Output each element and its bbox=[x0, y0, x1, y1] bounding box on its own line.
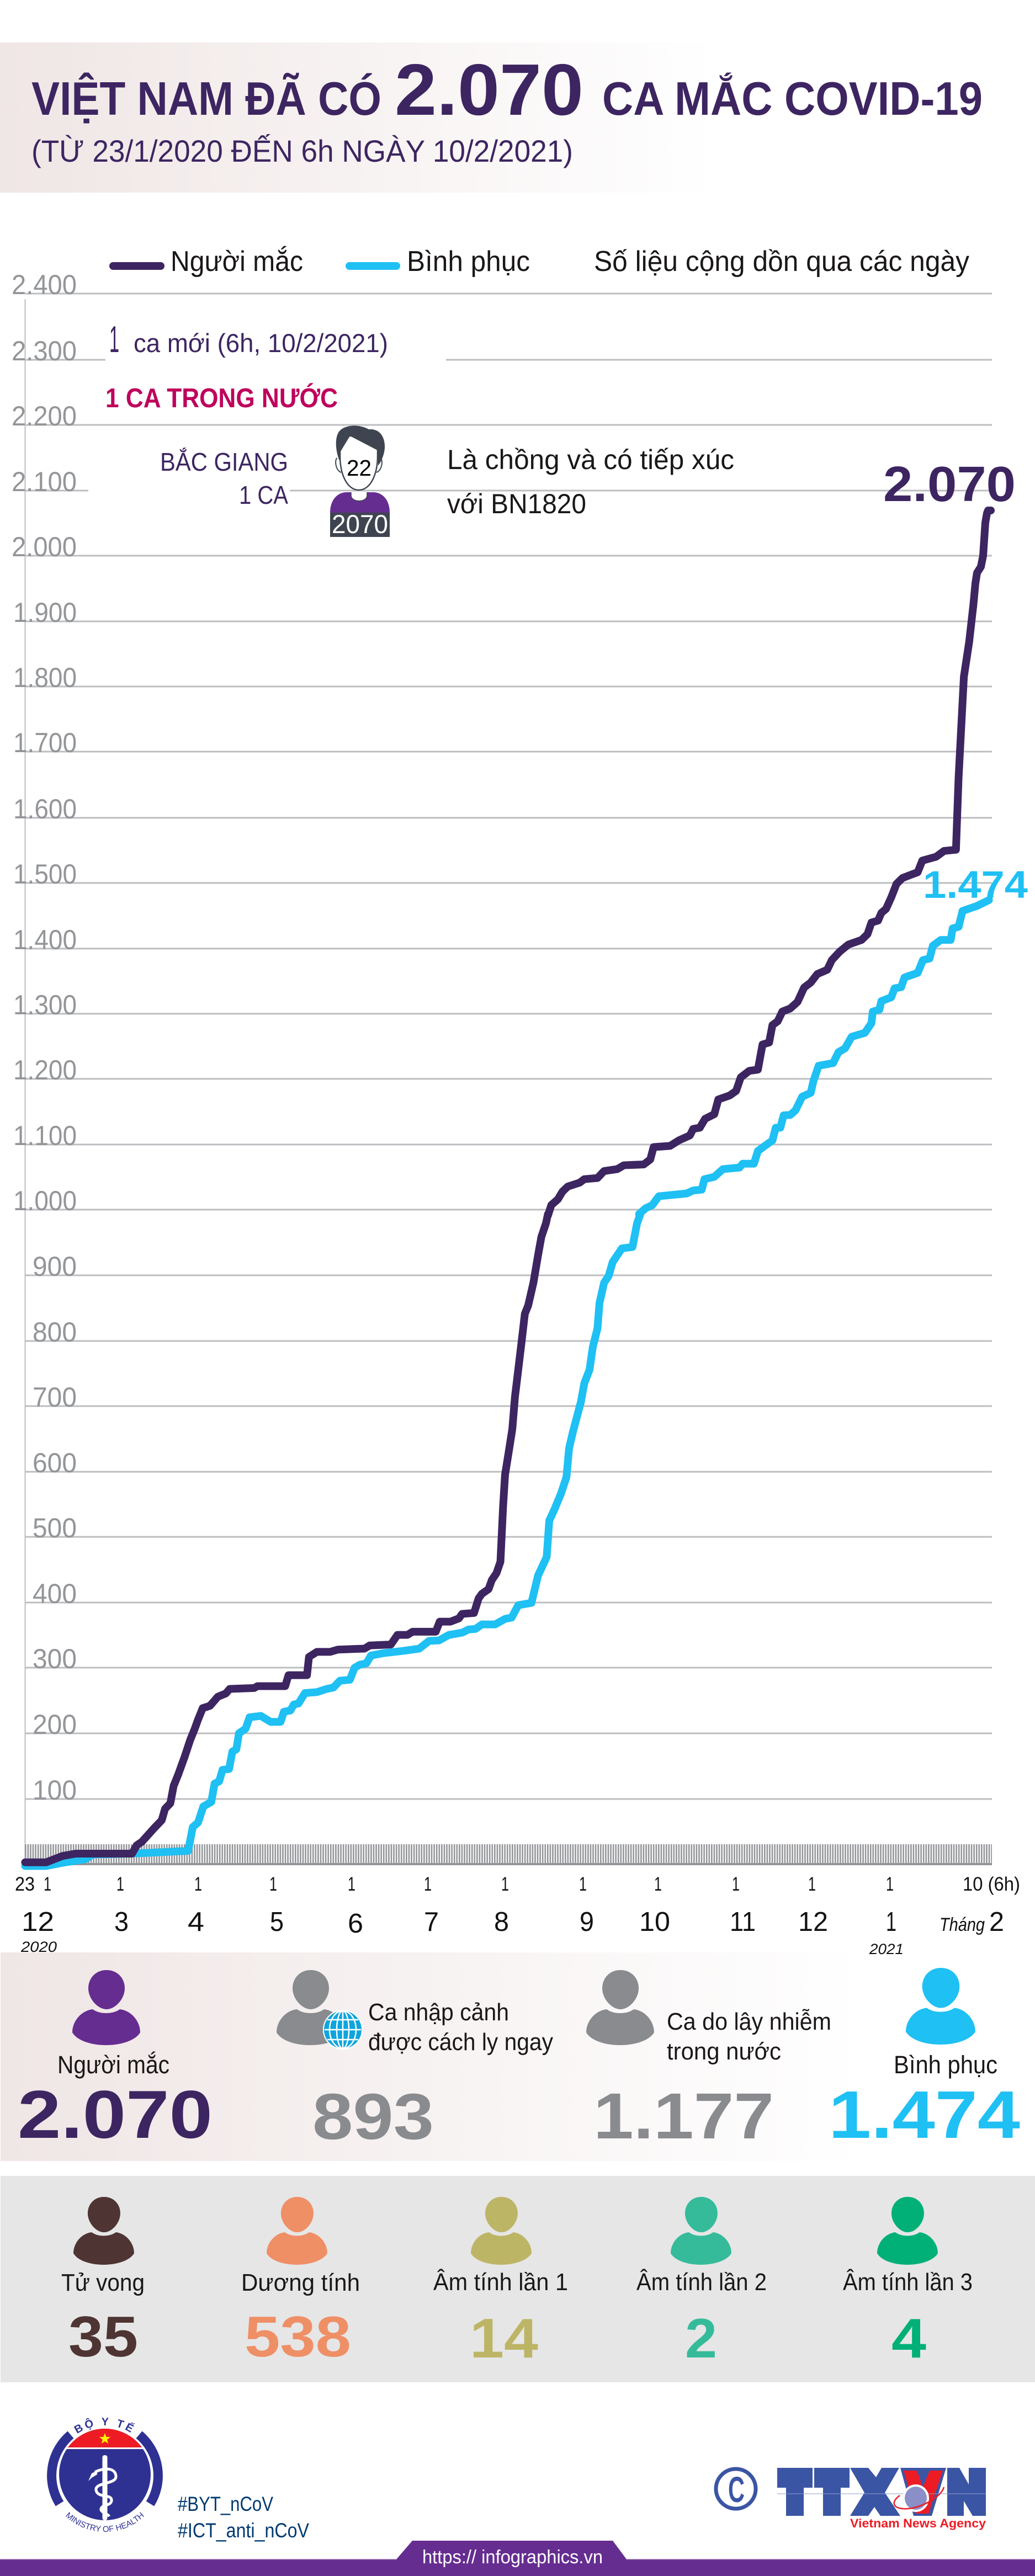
stat: domestic bbox=[586, 1970, 831, 2153]
y axis labels: 1.100 bbox=[13, 1120, 77, 1151]
status: negative once: 14 bbox=[470, 2308, 538, 2370]
y axis labels: 1.900 bbox=[13, 597, 77, 628]
x axis month labels: 5 bbox=[270, 1907, 284, 1937]
y axis labels: 1.500 bbox=[13, 859, 77, 890]
title: 2.070 bbox=[395, 49, 583, 130]
end value: recovered: 1.474 bbox=[923, 863, 1028, 906]
y axis labels: 1.000 bbox=[13, 1185, 77, 1216]
x axis day labels: 1 bbox=[886, 1874, 894, 1895]
patient icon: 22 bbox=[347, 455, 371, 481]
y axis labels bbox=[12, 269, 77, 1806]
title: CA MẮC COVID-19 bbox=[602, 72, 983, 125]
patient icon bbox=[330, 425, 390, 539]
x axis day labels: 1 bbox=[808, 1874, 816, 1895]
x axis day labels: 1 bbox=[501, 1874, 509, 1895]
footer bar bbox=[0, 2541, 1035, 2576]
location label: BẮC GIANG bbox=[160, 448, 288, 476]
x axis day labels: 1 bbox=[579, 1874, 587, 1895]
x axis month labels bbox=[22, 1907, 1004, 1939]
stat: domestic: Ca do lây nhiễm bbox=[667, 2008, 831, 2035]
logo: ministry of health: BỘ Y TẾ bbox=[74, 2418, 135, 2434]
x axis day labels: 1 bbox=[424, 1874, 432, 1895]
hashtags bbox=[178, 2493, 309, 2542]
panel: patient status bbox=[1, 2176, 1035, 2382]
y axis labels: 1.800 bbox=[13, 662, 77, 693]
status: deaths: 35 bbox=[68, 2305, 138, 2369]
status: negative three times bbox=[843, 2197, 973, 2370]
y axis labels: 200 bbox=[33, 1709, 77, 1740]
stat: imported: được cách ly ngay bbox=[368, 2029, 553, 2056]
y axis labels: 100 bbox=[33, 1775, 77, 1806]
status: negative three times: Âm tính lần 3 bbox=[843, 2269, 973, 2296]
y axis labels: 800 bbox=[33, 1317, 77, 1348]
x axis month labels: 7 bbox=[424, 1907, 439, 1937]
status: negative once: Âm tính lần 1 bbox=[433, 2269, 568, 2296]
status: positive: Dương tính bbox=[241, 2269, 360, 2296]
year 2021 label: 2021 bbox=[869, 1941, 904, 1957]
x axis day labels: 1 bbox=[44, 1874, 51, 1895]
status: negative once bbox=[433, 2197, 568, 2370]
legend: Số liệu cộng dồn qua các ngày bbox=[594, 246, 969, 278]
status: negative three times: 4 bbox=[891, 2308, 926, 2370]
stat: imported: Ca nhập cảnh bbox=[368, 1999, 509, 2026]
stat: domestic: trong nước bbox=[667, 2038, 781, 2065]
x axis day labels: 1 bbox=[348, 1874, 355, 1895]
logo: TTXVN: C bbox=[728, 2469, 745, 2510]
location label: 1 CA bbox=[239, 481, 288, 509]
header band bbox=[0, 42, 983, 193]
stat: confirmed: Người mắc bbox=[57, 2051, 169, 2079]
y axis labels: 1.300 bbox=[13, 989, 77, 1020]
x axis month labels: 12 bbox=[798, 1907, 828, 1937]
y axis labels: 2.300 bbox=[12, 336, 77, 366]
x axis month labels: 2 bbox=[989, 1907, 1004, 1937]
patient icon: 2070 bbox=[332, 509, 388, 539]
y axis labels: 2.200 bbox=[12, 401, 77, 432]
logo: ministry of health: MINISTRY OF HEALTH bbox=[66, 2512, 144, 2532]
y axis labels: 300 bbox=[33, 1643, 77, 1674]
x axis day labels: 1 bbox=[732, 1874, 740, 1895]
month axis caption: Tháng bbox=[940, 1914, 985, 1935]
logo: ministry of health bbox=[47, 2418, 163, 2532]
logo: TTXVN bbox=[716, 2468, 986, 2530]
x axis month labels: 6 bbox=[348, 1909, 363, 1939]
x axis month labels: 10 bbox=[639, 1907, 670, 1937]
status: deaths bbox=[61, 2197, 145, 2369]
status: negative twice: 2 bbox=[685, 2308, 717, 2370]
x axis month labels: 4 bbox=[188, 1907, 204, 1937]
website link: https:// infographics.vn bbox=[422, 2547, 603, 2568]
y axis labels: 400 bbox=[33, 1578, 77, 1609]
y axis labels: 700 bbox=[33, 1382, 77, 1413]
x axis day labels: 1 bbox=[269, 1874, 277, 1895]
x axis day labels: 1 bbox=[116, 1874, 124, 1895]
case description: Là chồng và có tiếp xúc bbox=[447, 444, 734, 475]
summary band bbox=[1, 1939, 1020, 2161]
y axis line bbox=[24, 299, 25, 1864]
location label bbox=[160, 448, 288, 509]
y axis labels: 1.700 bbox=[13, 727, 77, 758]
chart gridlines bbox=[25, 294, 992, 1799]
case description bbox=[447, 444, 734, 519]
stat: confirmed: 2.070 bbox=[18, 2077, 213, 2153]
y axis labels: 2.100 bbox=[12, 466, 77, 497]
title bbox=[31, 49, 983, 130]
legend bbox=[113, 246, 969, 278]
new case heading: 1 bbox=[109, 318, 119, 360]
legend: Bình phục bbox=[407, 246, 530, 278]
stat: recovered bbox=[829, 1968, 1020, 2152]
y axis labels: 600 bbox=[33, 1447, 77, 1478]
x axis month labels: 9 bbox=[580, 1907, 594, 1937]
logo: TTXVN: Vietnam News Agency bbox=[850, 2516, 986, 2530]
legend: Người mắc bbox=[171, 246, 303, 278]
y axis labels: 900 bbox=[33, 1251, 77, 1282]
stat: recovered: Bình phục bbox=[894, 2051, 997, 2079]
status: deaths: Tử vong bbox=[61, 2269, 145, 2296]
x axis day labels: 23 bbox=[15, 1874, 35, 1895]
new case heading: ca mới (6h, 10/2/2021) bbox=[134, 328, 388, 358]
y axis labels: 1.600 bbox=[13, 794, 77, 824]
subtitle: (TỪ 23/1/2020 ĐẾN 6h NGÀY 10/2/2021) bbox=[31, 134, 573, 168]
x axis tick band bbox=[24, 1844, 992, 1864]
case description: với BN1820 bbox=[447, 488, 586, 519]
x axis day labels: 10 (6h) bbox=[963, 1874, 1020, 1895]
x axis day labels bbox=[15, 1874, 1020, 1895]
new case heading bbox=[109, 318, 388, 360]
x axis month labels: 1 bbox=[886, 1907, 896, 1937]
line: recovered bbox=[25, 900, 989, 1866]
y axis labels: 1.400 bbox=[13, 924, 77, 955]
x axis month labels: 12 bbox=[22, 1907, 54, 1937]
y axis labels: 500 bbox=[33, 1513, 77, 1544]
status: positive: 538 bbox=[245, 2305, 351, 2369]
y axis labels: 1.200 bbox=[13, 1055, 77, 1085]
domestic case heading: 1 CA TRONG NƯỚC bbox=[105, 383, 338, 413]
y axis labels: 2.400 bbox=[12, 269, 77, 300]
x axis month labels: 3 bbox=[114, 1907, 129, 1937]
title: VIỆT NAM ĐÃ CÓ bbox=[31, 72, 381, 125]
hashtags: #BYT_nCoV bbox=[178, 2493, 273, 2515]
x axis day labels: 1 bbox=[654, 1874, 662, 1895]
x axis month labels: 8 bbox=[494, 1907, 509, 1937]
y axis labels: 2.000 bbox=[12, 531, 77, 562]
stat: confirmed bbox=[18, 1970, 213, 2153]
stat: imported: 893 bbox=[312, 2080, 434, 2153]
line: confirmed cases bbox=[25, 510, 991, 1862]
hashtags: #ICT_anti_nCoV bbox=[178, 2519, 309, 2542]
status: positive bbox=[241, 2197, 360, 2369]
stat: recovered: 1.474 bbox=[829, 2077, 1020, 2152]
end value: confirmed: 2.070 bbox=[883, 457, 1016, 512]
x axis day labels: 1 bbox=[194, 1874, 202, 1895]
year 2020 label: 2020 bbox=[20, 1939, 57, 1955]
status: negative twice: Âm tính lần 2 bbox=[636, 2269, 767, 2296]
stat: imported bbox=[277, 1970, 553, 2153]
x axis month labels: 11 bbox=[730, 1907, 756, 1937]
status: negative twice bbox=[636, 2197, 767, 2370]
stat: domestic: 1.177 bbox=[593, 2080, 774, 2153]
